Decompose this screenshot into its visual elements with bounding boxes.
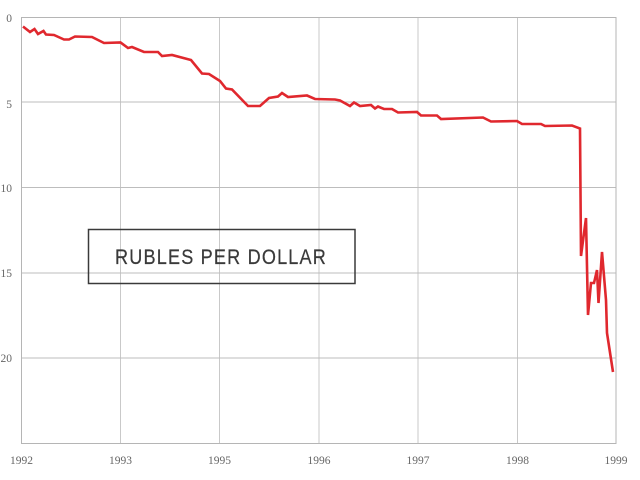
y axis labels: 10 xyxy=(0,183,12,195)
x axis labels: 1996 xyxy=(308,455,331,467)
x axis labels: 1998 xyxy=(506,455,529,467)
y axis labels: 20 xyxy=(0,353,12,365)
exchange rate line xyxy=(23,26,613,372)
x axis labels: 1993 xyxy=(109,455,132,467)
x axis labels xyxy=(10,455,628,467)
y axis labels: 5 xyxy=(6,99,12,111)
y axis labels: 15 xyxy=(0,268,12,280)
chart title box xyxy=(88,230,355,284)
x axis labels: 1992 xyxy=(10,455,33,467)
x axis labels: 1999 xyxy=(604,455,628,467)
chart title: RUBLES PER DOLLAR xyxy=(115,246,326,269)
x axis labels: 1995 xyxy=(208,455,231,467)
y axis labels xyxy=(0,13,12,365)
x axis labels: 1997 xyxy=(406,455,430,467)
y axis labels: 0 xyxy=(6,13,12,25)
